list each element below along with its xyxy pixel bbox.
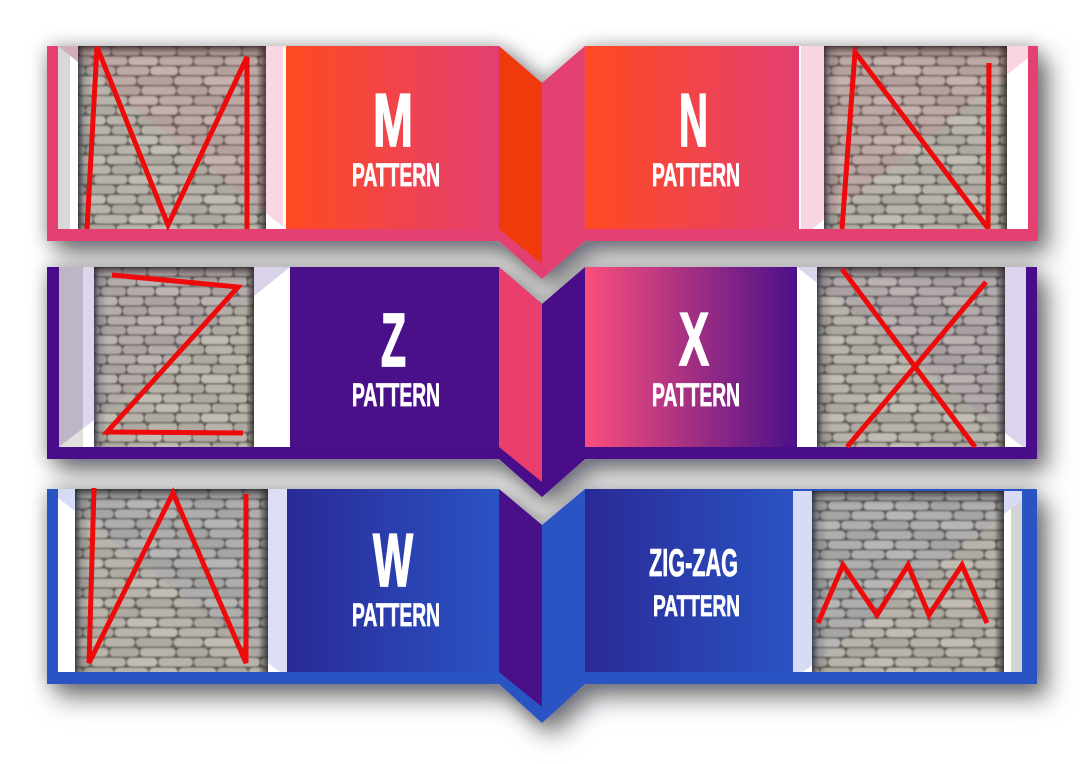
M pattern card bbox=[58, 42, 499, 233]
N label text: N bbox=[679, 78, 708, 162]
X label text: X bbox=[679, 297, 709, 381]
row 1 centre fold bbox=[499, 46, 542, 264]
row 2 ribbon frame bbox=[47, 267, 1037, 497]
panel: row 2, Z and X patterns bbox=[47, 263, 1037, 497]
M label text bbox=[352, 78, 440, 193]
row 2 centre fold bbox=[499, 267, 542, 482]
zig-zag label text: ZIG-ZAG bbox=[649, 542, 738, 585]
zig-zag photo of stacked sacks bbox=[808, 487, 1008, 676]
X label text bbox=[652, 297, 740, 413]
Z red line overlay bbox=[107, 275, 243, 433]
zig-zag photo side strips bbox=[793, 491, 1022, 672]
N photo side strips bbox=[799, 46, 1028, 229]
M red line overlay bbox=[87, 47, 247, 229]
Z label text bbox=[352, 298, 440, 413]
W red line overlay bbox=[89, 488, 246, 663]
W label text: PATTERN bbox=[352, 597, 440, 633]
W label panel bbox=[287, 489, 499, 672]
W label text bbox=[352, 518, 440, 633]
Z label text: PATTERN bbox=[352, 377, 440, 413]
W photo side strips bbox=[58, 489, 287, 672]
N label text: PATTERN bbox=[652, 157, 740, 193]
panel: row 3, W and zig-zag patterns bbox=[47, 485, 1037, 723]
N label panel bbox=[585, 46, 799, 229]
panel: row 1, M and N patterns bbox=[47, 42, 1038, 279]
Z label text: Z bbox=[381, 298, 406, 382]
N photo of stacked sacks bbox=[820, 42, 1011, 233]
row 3 centre fold bbox=[499, 489, 542, 707]
M label panel bbox=[286, 46, 499, 229]
N pattern card bbox=[585, 42, 1028, 233]
M label text: PATTERN bbox=[352, 157, 440, 193]
X photo side strips bbox=[797, 267, 1026, 447]
N red line overlay bbox=[842, 52, 987, 229]
Z label panel bbox=[290, 267, 499, 447]
zig-zag label text bbox=[649, 542, 740, 623]
M photo side strips bbox=[58, 46, 286, 229]
W label text: W bbox=[373, 518, 413, 602]
X red line overlay bbox=[842, 269, 986, 447]
W pattern card bbox=[58, 485, 499, 676]
N label text bbox=[652, 78, 740, 193]
X pattern card bbox=[585, 263, 1026, 451]
W photo of stacked sacks bbox=[71, 485, 272, 676]
X photo of stacked sacks bbox=[813, 263, 1009, 451]
zig-zag label text: PATTERN bbox=[653, 590, 740, 623]
Z pattern card bbox=[59, 263, 499, 451]
row 3 ribbon frame bbox=[47, 489, 1037, 723]
row 1 ribbon frame bbox=[47, 46, 1038, 279]
M label text: M bbox=[373, 78, 413, 162]
M photo of stacked sacks bbox=[74, 42, 270, 233]
Z photo side strips bbox=[59, 267, 290, 447]
X label panel bbox=[585, 267, 797, 447]
Z photo of stacked sacks bbox=[91, 263, 257, 451]
zig-zag red line overlay bbox=[818, 565, 987, 623]
zig-zag pattern card bbox=[585, 487, 1022, 676]
zig-zag label panel bbox=[585, 489, 793, 672]
X label text: PATTERN bbox=[652, 377, 740, 413]
